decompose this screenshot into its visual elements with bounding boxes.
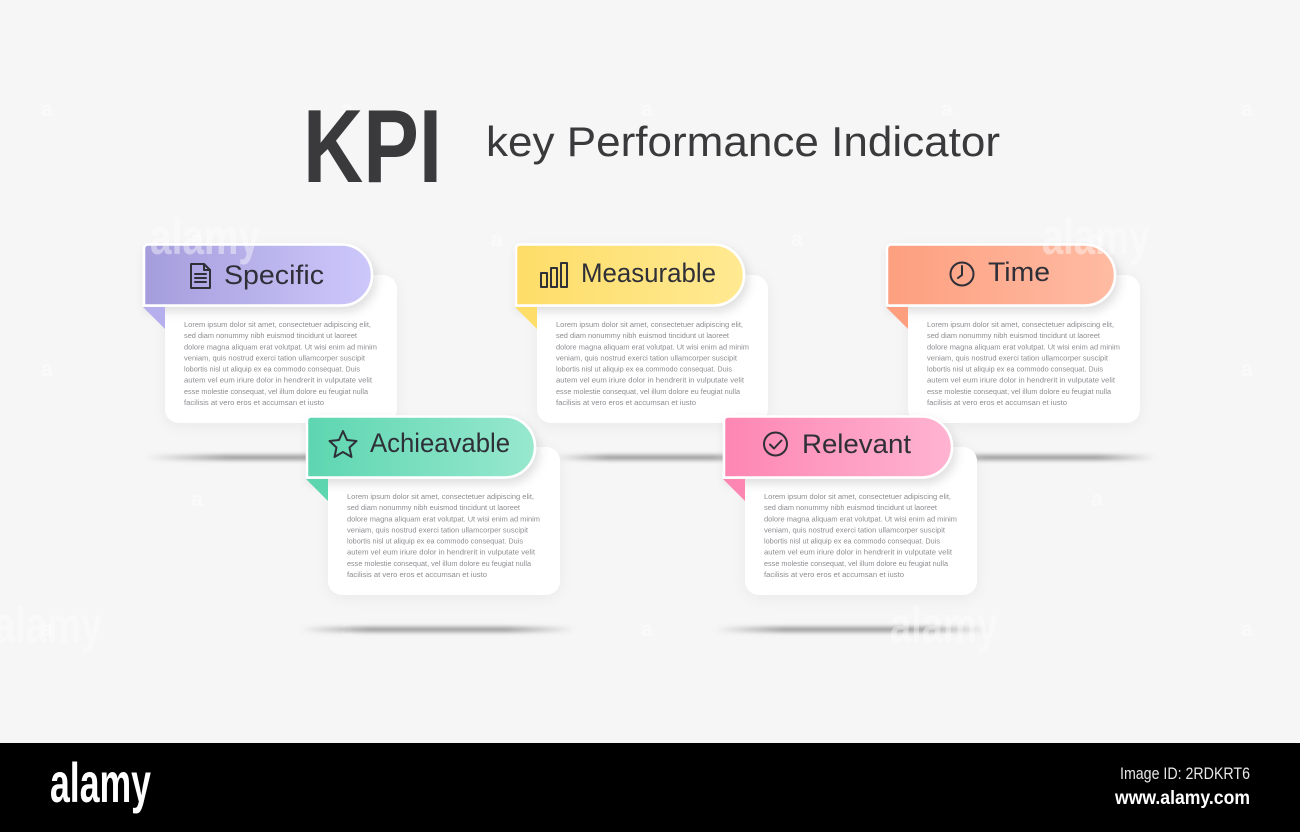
watermark pattern: a [941,358,953,381]
card: Time body: esse molestie consequat, vel illum dolore eu feugiat nulla [927,389,1111,396]
panel: Achieavable [306,416,560,595]
card: Time body: autem vel eum iriure dolor in hendrerit in vulputate velit [927,378,1115,384]
card: Achieavable body: Lorem ipsum dolor sit amet, consectetuer adipiscing elit, [347,494,534,501]
card: Relevant body [745,447,977,595]
watermark pattern: a [1241,98,1253,121]
watermark pattern: a [791,488,803,511]
card: Specific body: Lorem ipsum dolor sit amet, consectetuer adipiscing elit, [184,322,371,329]
heading: Measurable: Measurable [581,258,716,288]
watermark pattern: a [1091,228,1103,251]
watermark pattern: a [641,98,653,121]
watermark pattern [41,98,1253,641]
card: Time body: sed diam nonummy nibh euismod tincidunt ut laoreet [927,333,1100,340]
card: Achieavable body: lobortis nisl ut aliquip ex ea commodo consequat. Duis [347,538,524,546]
card: Relevant body: veniam, quis nostrud exerci tation ullamcorper suscipit [764,528,945,534]
card: Measurable body: autem vel eum iriure dolor in hendrerit in vulputate velit [556,378,744,384]
card: Specific body: facilisis at vero eros et accumsan et iusto [184,400,324,407]
card: Measurable body: veniam, quis nostrud exerci tation ullamcorper suscipit [556,356,737,362]
watermark pattern: a [41,98,53,121]
banner fold: Achieavable [306,479,328,501]
footer logo: alamy: alamy [50,751,151,814]
icon: clock [950,262,974,286]
card: Specific body: lobortis nisl ut aliquip ex ea commodo consequat. Duis [184,366,361,374]
card: Achieavable body [328,447,560,595]
footer image id: Image ID: 2RDKRT6 [1120,764,1250,783]
heading: Relevant: Relevant [802,429,911,459]
panel: Specific [143,244,397,423]
card: Specific body: autem vel eum iriure dolor in hendrerit in vulputate velit [184,378,372,384]
card: Measurable body: dolore magna aliquam erat volutpat. Ut wisi enim ad minim [556,344,749,352]
watermarks: alamy: alamy [150,209,260,265]
watermark pattern: a [1241,358,1253,381]
icon: star [330,431,356,457]
card: Achieavable body: sed diam nonummy nibh euismod tincidunt ut laoreet [347,505,520,512]
card: Measurable body: lobortis nisl ut aliquip ex ea commodo consequat. Duis [556,366,733,374]
panel: Time [886,244,1140,423]
panel: Measurable [515,244,768,423]
watermarks: alamy [0,209,1150,653]
watermarks: alamy: alamy [890,597,998,653]
banner fold: Relevant [723,479,745,501]
card: Time body: facilisis at vero eros et accumsan et iusto [927,400,1067,407]
card: Achieavable body: veniam, quis nostrud exerci tation ullamcorper suscipit [347,528,528,534]
heading: Achieavable: Achieavable [370,428,510,458]
card: Measurable body [537,275,768,423]
banner fold: Specific [143,307,165,329]
watermark pattern: a [41,618,53,641]
heading: Specific: Specific [224,260,324,290]
card: Time body: dolore magna aliquam erat volutpat. Ut wisi enim ad minim [927,344,1120,352]
card: Relevant body: lobortis nisl ut aliquip ex ea commodo consequat. Duis [764,538,941,546]
watermark pattern: a [1241,618,1253,641]
watermark pattern: a [791,228,803,251]
card: Relevant body: sed diam nonummy nibh euismod tincidunt ut laoreet [764,505,937,512]
floor shadows [145,455,1155,632]
card: Achieavable body: esse molestie consequat, vel illum dolore eu feugiat nulla [347,561,531,568]
watermark pattern: a [191,228,203,251]
watermark pattern: a [491,488,503,511]
banner fold: Measurable [515,307,537,329]
watermark pattern: a [191,488,203,511]
watermark pattern: a [341,358,353,381]
watermark pattern: a [941,98,953,121]
card: Specific body: dolore magna aliquam erat volutpat. Ut wisi enim ad minim [184,344,377,352]
watermark pattern: a [641,358,653,381]
subtitle: Key Performance Indicator: key Performance Indicator [486,118,1000,165]
card: Measurable body: Lorem ipsum dolor sit amet, consectetuer adipiscing elit, [556,322,743,329]
icon: document [191,264,210,288]
card: Relevant body: autem vel eum iriure dolor in hendrerit in vulputate velit [764,550,952,556]
watermark pattern: a [341,618,353,641]
card: Achieavable body: facilisis at vero eros et accumsan et iusto [347,572,487,579]
banner: Achieavable [307,416,535,478]
banner: Time [887,244,1115,306]
card: Specific body [165,275,397,423]
card: Specific body: sed diam nonummy nibh euismod tincidunt ut laoreet [184,333,357,340]
card: Relevant body: esse molestie consequat, vel illum dolore eu feugiat nulla [764,561,948,568]
footer url: www.alamy.com [1114,788,1250,809]
card: Measurable body: esse molestie consequat, vel illum dolore eu feugiat nulla [556,389,740,396]
card: Achieavable body: autem vel eum iriure dolor in hendrerit in vulputate velit [347,550,535,556]
card: Achieavable body: dolore magna aliquam erat volutpat. Ut wisi enim ad minim [347,516,540,524]
watermark pattern: a [941,618,953,641]
card: Measurable body: facilisis at vero eros et accumsan et iusto [556,400,696,407]
card: Relevant body: dolore magna aliquam erat volutpat. Ut wisi enim ad minim [764,516,957,524]
watermark pattern: a [341,98,353,121]
title: KPI: KPI [303,89,442,205]
watermarks: alamy: alamy [1042,209,1150,265]
card: Measurable body: sed diam nonummy nibh euismod tincidunt ut laoreet [556,333,729,340]
banner: Relevant [724,416,952,478]
card: Time body [908,275,1140,423]
card: Specific body: veniam, quis nostrud exerci tation ullamcorper suscipit [184,356,365,362]
watermark pattern: a [491,228,503,251]
card: Relevant body: facilisis at vero eros et accumsan et iusto [764,572,904,579]
icon: bar chart [541,263,567,287]
heading: Time: Time [988,257,1050,287]
footer bar [0,743,1300,832]
banner fold: Time [886,307,908,329]
card: Time body: Lorem ipsum dolor sit amet, consectetuer adipiscing elit, [927,322,1114,329]
card: Time body: veniam, quis nostrud exerci tation ullamcorper suscipit [927,356,1108,362]
card: Relevant body: Lorem ipsum dolor sit amet, consectetuer adipiscing elit, [764,494,951,501]
banner: Specific [144,244,372,306]
icon: check circle [764,432,787,456]
banner: Measurable [516,244,744,306]
card: Time body: lobortis nisl ut aliquip ex ea commodo consequat. Duis [927,366,1104,374]
watermark pattern: a [641,618,653,641]
watermark pattern: a [41,358,53,381]
watermark pattern: a [1091,488,1103,511]
panel: Relevant [723,416,977,595]
card: Specific body: esse molestie consequat, vel illum dolore eu feugiat nulla [184,389,368,396]
